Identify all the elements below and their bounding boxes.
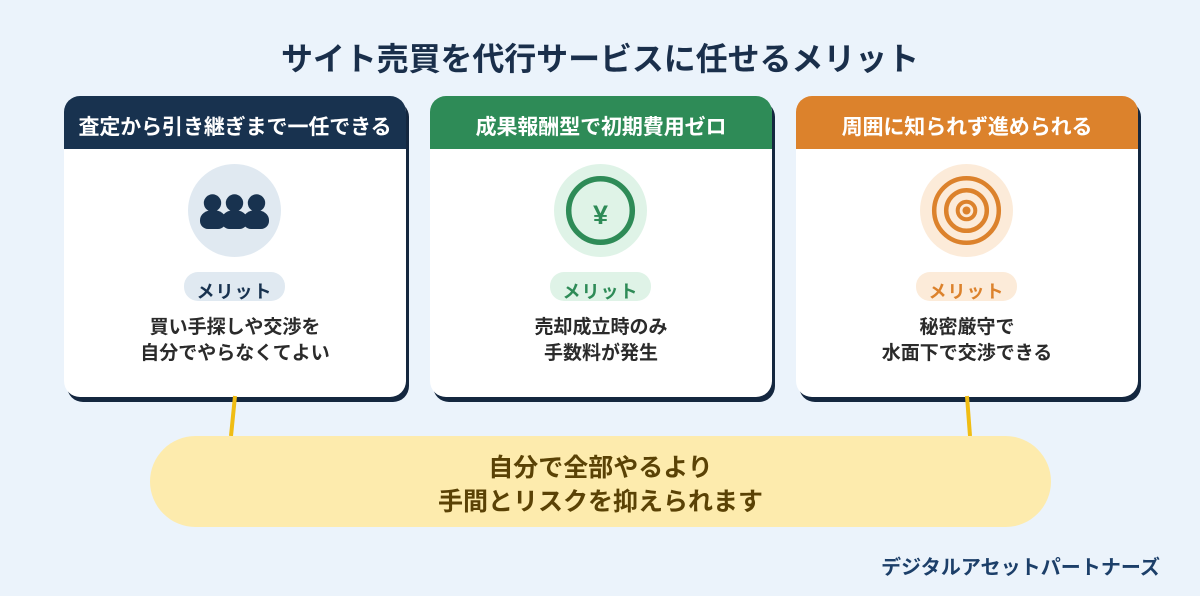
- badge: merit: [550, 272, 651, 301]
- heading: confidentiality: [796, 96, 1138, 149]
- description: 売却成立時のみ: [534, 317, 668, 338]
- panel: confidentiality merit: [796, 96, 1138, 397]
- icon: yen coin: [554, 164, 647, 257]
- heading: full service: [64, 96, 406, 149]
- description: [882, 316, 1052, 364]
- description: 買い手探しや交渉を: [150, 317, 320, 338]
- icon: three people: [188, 164, 281, 257]
- badge: merit: メリット: [928, 282, 1004, 302]
- callout: summary: 手間とリスクを抑えられます: [438, 488, 763, 516]
- heading: success fee: 成果報酬型で初期費用ゼロ: [476, 116, 726, 139]
- brand name: デジタルアセットパートナーズ: [881, 557, 1160, 579]
- panel: success-fee merit: [430, 96, 772, 397]
- badge: merit: [916, 272, 1017, 301]
- description: 手数料が発生: [544, 343, 658, 364]
- panel: full-service merit: [64, 96, 406, 397]
- description: 自分でやらなくてよい: [140, 343, 330, 364]
- heading: confidentiality: 周囲に知られず進められる: [842, 116, 1092, 139]
- icon: concentric target: [920, 164, 1013, 257]
- heading: full service: 査定から引き継ぎまで一任できる: [78, 116, 392, 139]
- description: [534, 316, 668, 364]
- description: [140, 316, 330, 364]
- icon: yen coin: ¥: [593, 200, 608, 230]
- badge: merit: メリット: [562, 282, 638, 302]
- description: 秘密厳守で: [919, 317, 1014, 338]
- description: 水面下で交渉できる: [882, 343, 1052, 364]
- callout: summary: [150, 436, 1051, 527]
- badge: merit: [184, 272, 285, 301]
- badge: merit: メリット: [196, 282, 272, 302]
- heading: success fee: [430, 96, 772, 149]
- callout: summary: 自分で全部やるより: [488, 454, 713, 482]
- title: サイト売買を代行サービスに任せるメリット: [281, 41, 919, 77]
